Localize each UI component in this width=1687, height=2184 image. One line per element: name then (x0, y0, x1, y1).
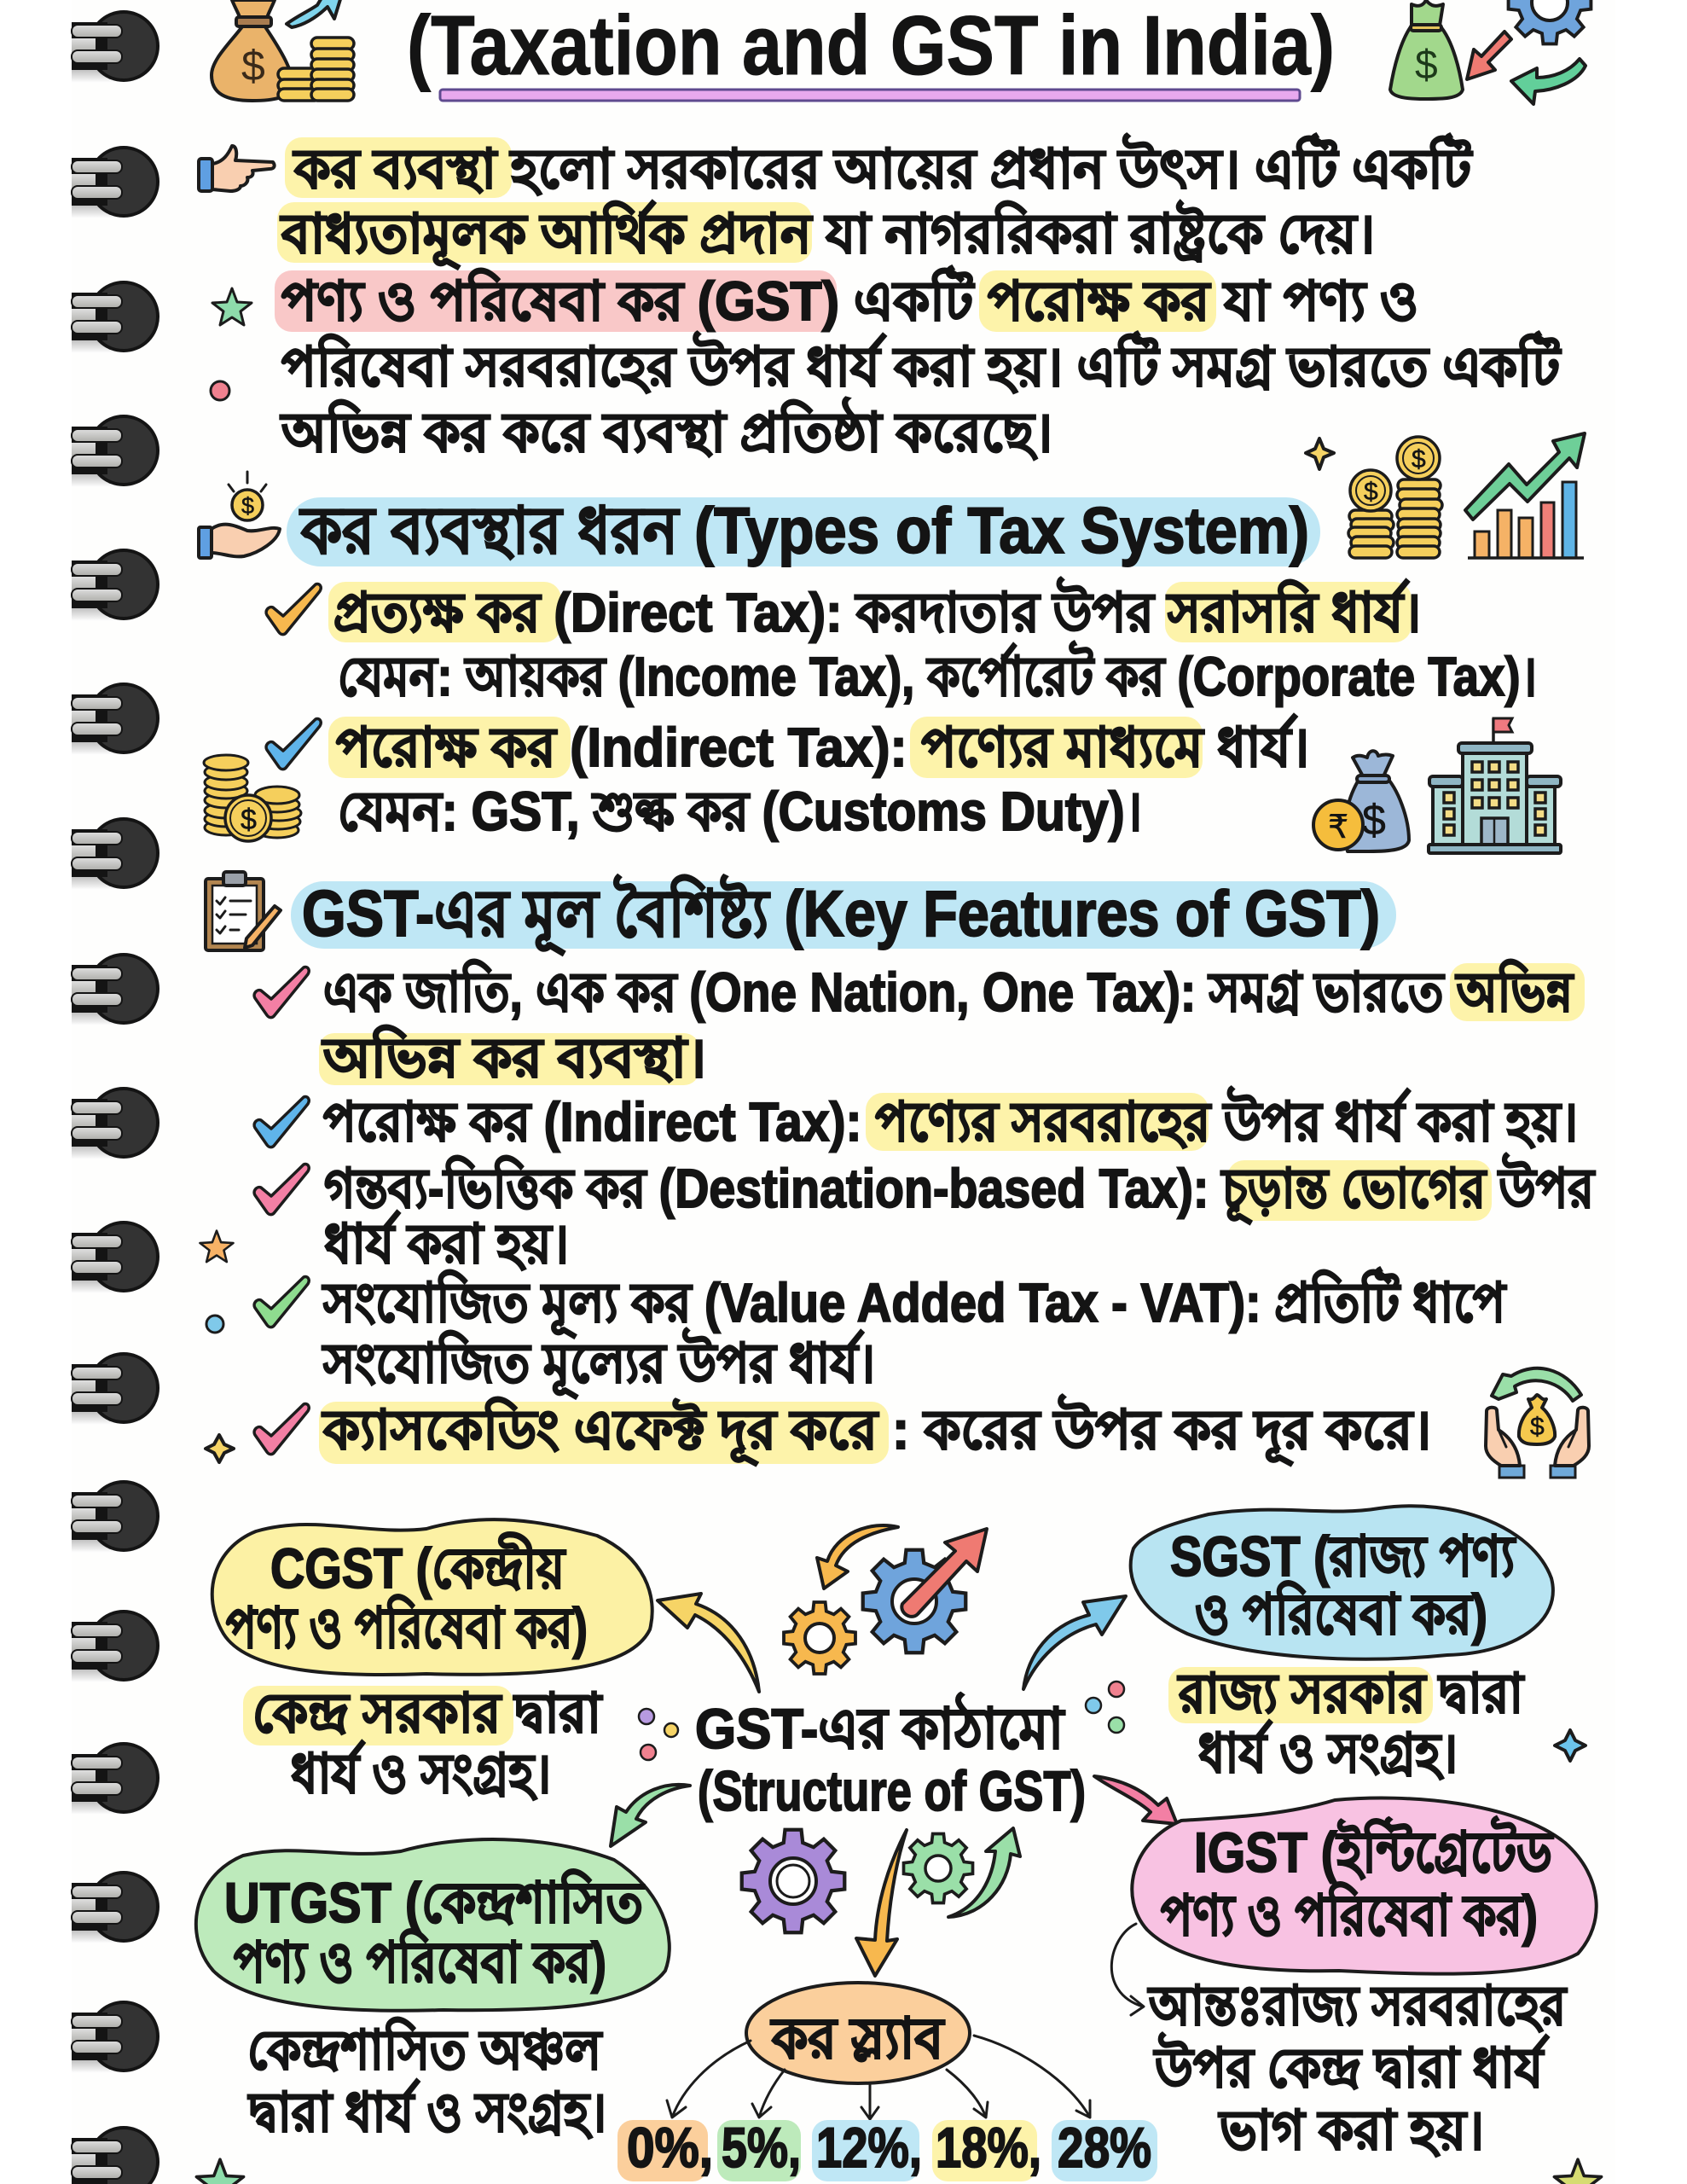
arrow to tax slab (856, 1830, 907, 1976)
feature lines: অভিন্ন কর ব্যবস্থা। (322, 1025, 706, 1089)
node: IGST: IGST (ইন্টিগ্রেটেড (1194, 1815, 1554, 1884)
node: CGST: পণ্য ও পরিষেবা কর) (226, 1594, 588, 1659)
title: (Taxation and GST in India) (407, 0, 1335, 92)
icon: blue check (266, 719, 321, 770)
node: UTGST (196, 1839, 670, 2011)
center title: (Structure of GST) (698, 1759, 1086, 1822)
center gears and arrows (784, 1525, 987, 1674)
diagram: structure of GST (196, 1506, 1597, 2181)
UTGST description (247, 2018, 606, 2143)
icon: coin pile left (204, 755, 301, 841)
arrow to CGST (658, 1594, 759, 1692)
icon: hands with money bag (1486, 1368, 1589, 1478)
feature lines: ক্যাসকেডিং এফেক্ট দূর করে : করের উপর কর দূর করে। (322, 1394, 1431, 1466)
icon: blue bag with rupee coin (1313, 751, 1409, 851)
slab rate tags (617, 2116, 1157, 2181)
icon: coin stacks: $ (1412, 445, 1426, 473)
icon: blue sparkle (1555, 1730, 1586, 1761)
CGST description: ধার্য ও সংগ্রহ। (291, 1740, 551, 1804)
feature lines: ধার্য করা হয়। (324, 1210, 569, 1275)
title underline (440, 90, 1300, 101)
indirect tax block: যেমন: GST, শুল্ক কর (Customs Duty)। (338, 781, 1142, 842)
icon: government building (1429, 718, 1561, 853)
node: SGST: ও পরিষেবা কর) (1195, 1580, 1487, 1646)
icon: hand holding coin: $ (241, 493, 254, 519)
icon: blue bag with rupee coin: $ (1362, 796, 1386, 844)
icon: green star (212, 288, 252, 325)
arrow to UTGST (611, 1785, 690, 1846)
node: UTGST: UTGST (কেন্দ্রশাসিত (224, 1868, 645, 1934)
bottom right star (1554, 2159, 1602, 2184)
feature lines (322, 960, 1596, 1466)
section: key features of GST (206, 872, 1596, 1466)
node: IGST (1132, 1798, 1597, 1974)
icon: orange check (266, 584, 321, 635)
IGST description: আন্তঃরাজ্য সরবরাহের (1147, 1975, 1568, 2036)
heading pill (291, 881, 1396, 949)
slab rate tags: 0%, (627, 2116, 713, 2179)
feature checks (254, 967, 309, 1455)
intro lines: কর ব্যবস্থা হলো সরকারের আয়ের প্রধান উৎস। এটি একটি (293, 133, 1473, 200)
slab rate tags: 5%, (722, 2116, 801, 2179)
heading text: GST-এর মূল বৈশিষ্ট্য (Key Features of GST) (302, 874, 1380, 956)
slab arrows (667, 2036, 1090, 2119)
arrow to IGST (1094, 1776, 1177, 1824)
icon: sparkle star (1306, 439, 1334, 469)
slab rate tags: 18%, (936, 2116, 1041, 2179)
icon: orange money bag with coins (212, 0, 354, 101)
node: CGST: CGST (কেন্দ্রীয় (270, 1531, 566, 1600)
section: types of tax system (199, 472, 1537, 842)
node: tax slab (746, 1983, 970, 2083)
lower gears (742, 1828, 1020, 1932)
center title (695, 1692, 1086, 1822)
intro lines (280, 133, 1562, 463)
IGST description: ভাগ করা হয়। (1218, 2100, 1484, 2161)
CGST description (243, 1682, 603, 1804)
icon: blue bag with rupee coin: ₹ (1328, 810, 1348, 845)
node: SGST (1131, 1506, 1553, 1659)
icon: blue dot (206, 1316, 223, 1333)
icon: growth chart (1465, 433, 1585, 558)
feature highlights (319, 963, 1585, 1464)
feature lines: সংযোজিত মূল্যের উপর ধার্য। (322, 1327, 875, 1399)
icon: orange star (200, 1231, 234, 1262)
SGST description (1168, 1663, 1525, 1784)
icon: coin stacks (1348, 437, 1442, 558)
icon: pink dot (211, 381, 229, 400)
indirect tax block (266, 713, 1309, 842)
IGST description (1111, 1924, 1568, 2161)
arrow to SGST (1023, 1596, 1126, 1689)
heading text: কর ব্যবস্থার ধরন (Types of Tax System) (299, 495, 1309, 567)
icon: hands with money bag: $ (1530, 1413, 1545, 1441)
icon: coin pile left: $ (241, 804, 257, 836)
icon: clipboard with pencil (206, 872, 281, 950)
SGST description: ধার্য ও সংগ্রহ। (1198, 1719, 1458, 1784)
icon: green money bag, gear and arrows (1390, 0, 1591, 104)
icon: green money bag, gear and arrows: $ (1415, 43, 1438, 88)
CGST description: কেন্দ্র সরকার দ্বারা (252, 1682, 603, 1744)
intro paragraph (199, 133, 1562, 463)
icon: pointing hand (199, 146, 275, 191)
icon: hand holding coin (199, 472, 280, 558)
direct tax block: প্রত্যক্ষ কর (Direct Tax): করদাতার উপর সরাসরি ধার্য। (333, 577, 1421, 643)
UTGST description: কেন্দ্রশাসিত অঞ্চল (247, 2018, 603, 2081)
intro lines: অভিন্ন কর করে ব্যবস্থা প্রতিষ্ঠা করেছে। (280, 397, 1052, 463)
spiral binding rings (72, 12, 158, 2184)
slab rate tags: 12%, (816, 2116, 922, 2179)
icon: coin stacks: $ (1364, 478, 1378, 506)
intro lines: পণ্য ও পরিষেবা কর (GST) একটি পরোক্ষ কর যা পণ্য ও (281, 265, 1418, 332)
node: IGST: পণ্য ও পরিষেবা কর) (1161, 1881, 1538, 1947)
indirect tax block: পরোক্ষ কর (Indirect Tax): পণ্যের মাধ্যমে ধার্য। (336, 713, 1309, 778)
SGST description: রাজ্য সরকার দ্বারা (1177, 1663, 1525, 1724)
icon: orange money bag with coins: $ (241, 42, 265, 90)
heading pill (287, 497, 1320, 566)
UTGST description: দ্বারা ধার্য ও সংগ্রহ। (247, 2078, 606, 2143)
feature lines: সংযোজিত মূল্য কর (Value Added Tax - VAT): প্রতিটি ধাপে (322, 1267, 1507, 1339)
center title: GST-এর কাঠামো (695, 1692, 1066, 1760)
node: CGST (212, 1519, 652, 1675)
IGST description: উপর কেন্দ্র দ্বারা ধার্য (1153, 2032, 1550, 2099)
intro lines: বাধ্যতামূলক আর্থিক প্রদান যা নাগররিকরা রাষ্ট্রকে দেয়। (280, 199, 1375, 270)
node: SGST: SGST (রাজ্য পণ্য (1170, 1525, 1516, 1588)
direct tax block (266, 577, 1537, 707)
icon: yellow sparkle (206, 1435, 234, 1462)
highlights (275, 137, 1216, 332)
node: UTGST: পণ্য ও পরিষেবা কর) (234, 1928, 606, 1994)
node: tax slab: কর স্ল্যাব (770, 2007, 945, 2070)
decorative dots (639, 1682, 1124, 1760)
bottom left star (196, 2159, 244, 2184)
intro lines: পরিষেবা সরবরাহের উপর ধার্য করা হয়। এটি সমগ্র ভারতে একটি (281, 331, 1562, 398)
slab rate tags: 28% (1058, 2116, 1151, 2179)
